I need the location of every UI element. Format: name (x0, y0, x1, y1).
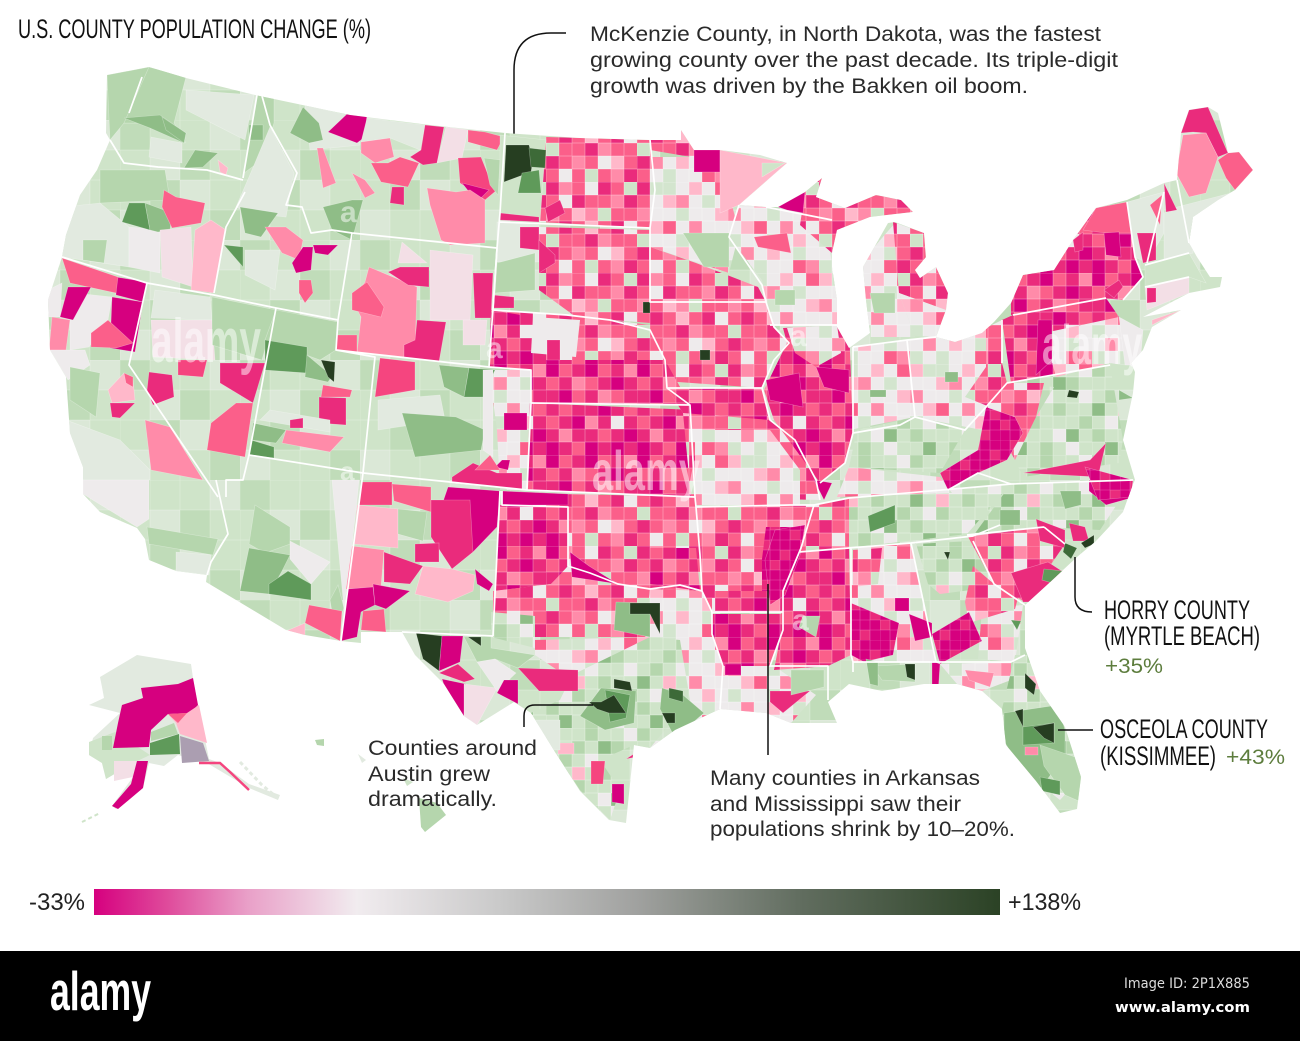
watermarks: a (790, 320, 807, 353)
Southwest counties (240, 480, 618, 725)
footer: stock image bar: www.alamy.com (1115, 1000, 1250, 1016)
watermarks: alamy (592, 439, 700, 502)
legend: colour scale: +138% (1008, 889, 1081, 916)
watermarks: a (340, 196, 357, 229)
callout: Arkansas and Mississippi: Many counties in Arkansas (710, 766, 980, 790)
callout: Austin counties (368, 705, 593, 811)
callout: McKenzie County: growth was driven by the Bakken oil boom. (590, 74, 1028, 98)
callout: Osceola County: +43% (1226, 746, 1285, 769)
legend: colour scale (29, 889, 1081, 916)
Northern Rockies counties (224, 95, 565, 303)
Mississippi Delta and Deep South counties (725, 480, 1133, 713)
callout: Osceola County: (KISSIMMEE) (1100, 741, 1216, 771)
callout: Horry County (1075, 557, 1260, 678)
callout: Osceola County (1058, 714, 1285, 771)
footer: stock image bar: Image ID: 2P1X885 (1124, 976, 1250, 992)
Northern California counties (48, 258, 218, 575)
callout: Austin counties: Counties around (368, 736, 537, 760)
footer: stock image bar: alamy (50, 960, 151, 1022)
watermarks: alamy (151, 307, 261, 376)
title: U.S. COUNTY POPULATION CHANGE (%) (18, 14, 371, 44)
watermarks: a (340, 456, 355, 486)
callout: Horry County: +35% (1105, 655, 1163, 678)
watermarks (151, 196, 1142, 637)
county washes: regional mosaic (489, 130, 1143, 820)
state borders (62, 77, 1189, 709)
callout: Austin counties: Austin grew (368, 762, 490, 786)
Florida counties (866, 659, 1081, 802)
callout: McKenzie County (514, 22, 1118, 145)
choropleth map: contiguous United States (48, 67, 1253, 823)
Central Texas fast-growth counties (535, 602, 704, 804)
legend: colour scale: -33% (29, 889, 85, 916)
callout: Austin counties: dramatically. (368, 787, 497, 811)
watermarks: a (486, 332, 503, 365)
callout: Arkansas and Mississippi (710, 584, 1015, 841)
Pacific Northwest counties (62, 67, 254, 293)
watermarks: a (792, 604, 809, 637)
callout: Arkansas and Mississippi: and Mississippi saw their (710, 792, 961, 816)
callout: McKenzie County: McKenzie County, in North Dakota, was the fastest (590, 22, 1101, 46)
inset map: Hawaii (315, 739, 446, 832)
footer: stock image bar (0, 951, 1300, 1041)
large counties and clusters (48, 67, 1253, 804)
callout: Arkansas and Mississippi: populations shrink by 10–20%. (710, 817, 1015, 841)
callout: McKenzie County: growing county over the past decade. Its triple-digit (590, 48, 1118, 72)
Midwest highlights (547, 150, 958, 500)
watermarks: alamy (1042, 313, 1142, 376)
Dakotas west and Wyoming counties (336, 222, 555, 362)
Great Basin and Utah counties (145, 290, 527, 490)
Appalachia and Northeast counties (940, 107, 1253, 500)
inset map: Alaska (82, 655, 280, 822)
